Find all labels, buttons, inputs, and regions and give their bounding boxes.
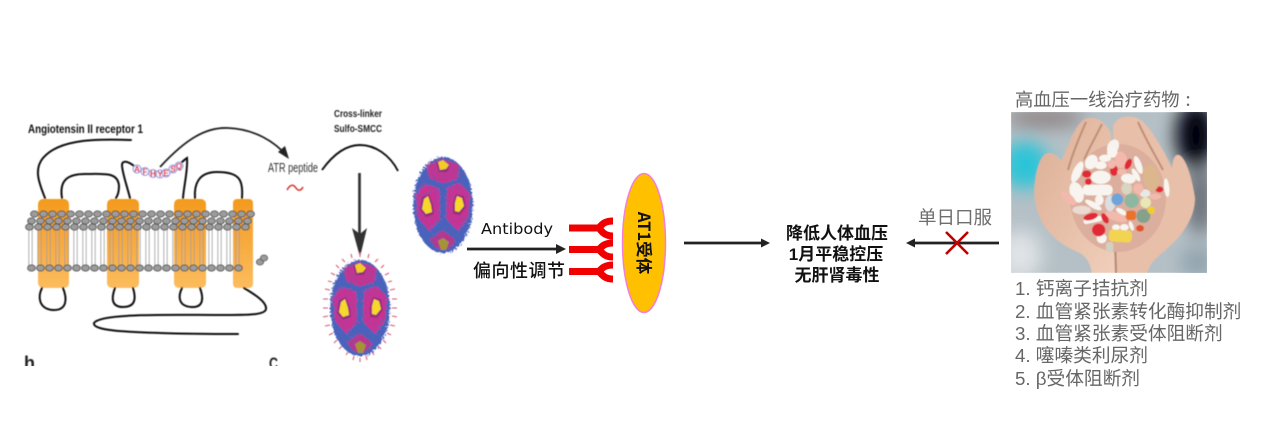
arrow: antibody to AT1 xyxy=(467,244,566,254)
outcome text xyxy=(786,224,888,285)
cross-linker arc xyxy=(322,145,398,171)
label: Cross-linker Sulfo-SMCC: Cross-linker xyxy=(334,109,382,120)
drug class list: 5. β受体阻断剂 xyxy=(1015,368,1140,389)
peptide AFHYESQ: S xyxy=(170,165,176,174)
label: Cross-linker Sulfo-SMCC: Sulfo-SMCC xyxy=(334,124,382,135)
virus particle xyxy=(413,157,473,253)
arrow: AT1 to outcome xyxy=(684,238,770,248)
arrow: down to conjugated virus xyxy=(352,173,367,257)
arrow: oral drugs to outcome xyxy=(906,238,999,248)
label: single-day oral: 单日口服 xyxy=(918,204,992,230)
drug class list: 3. 血管紧张素受体阻断剂 xyxy=(1015,323,1223,344)
peptide AFHYESQ: A xyxy=(134,165,140,174)
peptide AFHYESQ: E xyxy=(163,169,169,178)
peptide AFHYESQ: Q xyxy=(176,162,182,171)
icon: red peptide squiggle xyxy=(287,185,303,190)
panel letter h: h xyxy=(24,353,35,373)
peptide AFHYESQ xyxy=(133,162,183,179)
label: biased modulation: 偏向性调节 xyxy=(473,257,565,283)
label: ATR peptide: ATR peptide xyxy=(268,161,318,175)
drug class list: 1. 钙离子拮抗剂 xyxy=(1015,278,1148,299)
icon: red cross xyxy=(946,232,968,254)
label: Angiotensin II receptor 1: Angiotensin II receptor 1 xyxy=(28,122,143,136)
outcome text: 降低人体血压 xyxy=(786,224,888,243)
icon: three red antibodies xyxy=(569,221,613,279)
drug class list xyxy=(1015,278,1241,389)
photo: pills in hands xyxy=(1011,112,1207,273)
heading: first-line drugs: 高血压一线治疗药物 : xyxy=(1015,86,1191,112)
receptor transmembrane helices xyxy=(38,199,253,288)
AT1 receptor ellipse xyxy=(622,174,666,312)
label: Antibody: Antibody xyxy=(481,220,553,238)
arrow: peptide to ATR peptide xyxy=(160,128,289,167)
panel: receptor and virus diagram xyxy=(24,109,473,373)
peptide AFHYESQ: F xyxy=(143,168,148,176)
outcome text: 无肝肾毒性 xyxy=(794,266,880,285)
outcome text: 1月平稳控压 xyxy=(789,244,883,264)
AT1 receptor ellipse: AT1受体 xyxy=(633,211,657,275)
label: Cross-linker Sulfo-SMCC xyxy=(334,109,382,135)
receptor protein chain xyxy=(38,140,266,334)
panel letter C: C xyxy=(269,354,278,373)
lipid bilayer xyxy=(25,209,268,273)
drug class list: 2. 血管紧张素转化酶抑制剂 xyxy=(1015,301,1241,322)
conjugated virus particle with peptides xyxy=(323,252,397,362)
pill pile xyxy=(1070,144,1166,252)
drug class list: 4. 噻嗪类利尿剂 xyxy=(1015,345,1148,366)
peptide AFHYESQ: H xyxy=(150,170,156,178)
peptide AFHYESQ: Y xyxy=(157,170,163,179)
